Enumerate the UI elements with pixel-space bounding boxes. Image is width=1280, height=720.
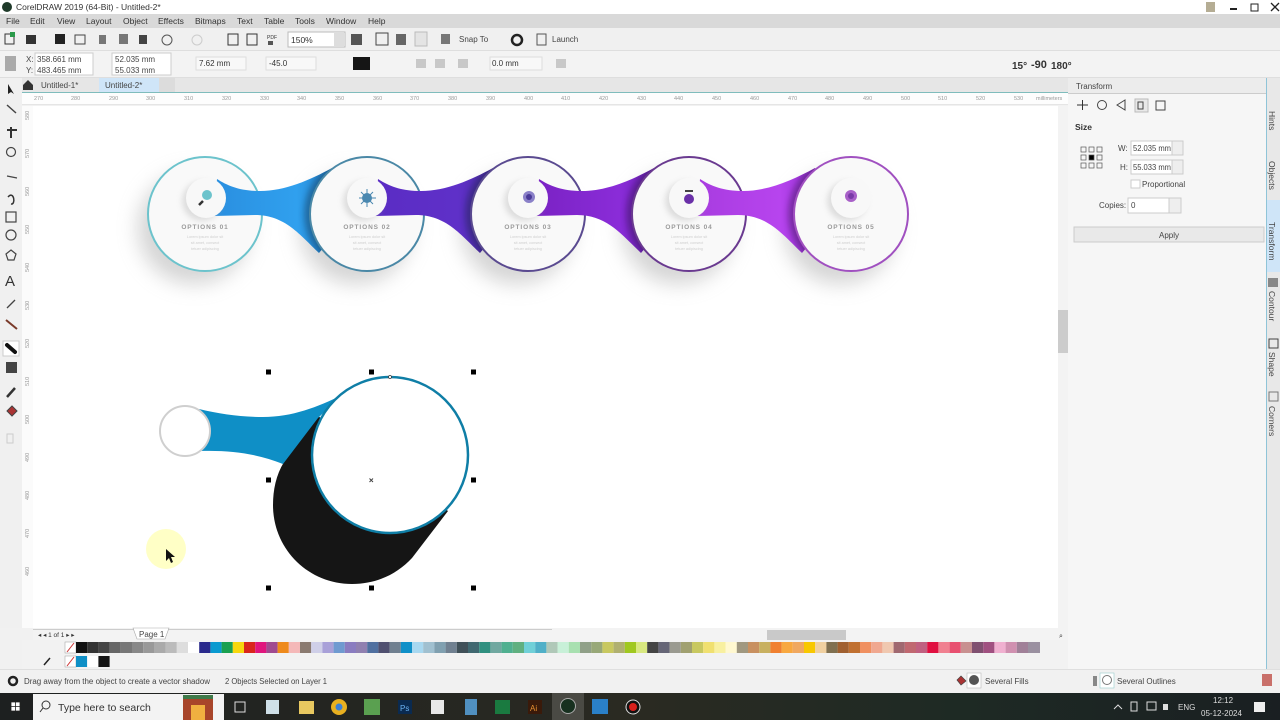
horizontal ruler [22, 92, 1068, 106]
menu bar: Window [326, 16, 357, 26]
menu bar: Text [237, 16, 253, 26]
system tray [1114, 696, 1265, 718]
ribbon 3 [536, 168, 654, 253]
vertical ruler: 520 [25, 339, 31, 348]
option 4: OPTIONS 04 [665, 224, 713, 231]
transform docker: Transform [1076, 82, 1112, 91]
colour palette [22, 640, 1068, 669]
standard toolbar: PDF [267, 35, 277, 41]
width field: W: [1118, 144, 1128, 153]
left toolbox: A [5, 273, 15, 290]
small circle with icon 3 [504, 178, 548, 221]
vertical ruler: 480 [25, 491, 31, 500]
status bar [0, 669, 1280, 693]
zoom level box: 150% [291, 35, 313, 45]
docker tool icons [1077, 99, 1165, 112]
active shadow tool [3, 341, 19, 356]
horizontal ruler: 380 [448, 96, 457, 102]
property bar: -45.0 [269, 59, 288, 68]
option 3 [471, 157, 585, 271]
system tray: ENG [1178, 703, 1195, 712]
option 2: Lorem ipsum dolor sit [349, 235, 386, 239]
fill colour swatch [353, 57, 370, 70]
system tray: 05-12-2024 [1201, 709, 1242, 718]
horizontal ruler: 300 [146, 96, 155, 102]
horizontal ruler: 510 [938, 96, 947, 102]
proportional checkbox: Proportional [1142, 180, 1185, 189]
option 5: tetuer adipiscing [837, 247, 865, 251]
right docker tabs: Objects [1267, 161, 1277, 190]
horizontal ruler: 280 [71, 96, 80, 102]
property bar [0, 50, 1280, 78]
vertical ruler: 500 [25, 415, 31, 424]
option 3: tetuer adipiscing [514, 247, 542, 251]
option 5 [794, 157, 908, 271]
right docker tabs [1266, 78, 1280, 669]
right docker tabs: Shape [1267, 352, 1277, 377]
right docker tabs: Transform [1267, 222, 1277, 260]
vertical ruler: 540 [25, 263, 31, 272]
taskbar app icons [235, 693, 640, 720]
standard toolbar: Snap To [459, 35, 489, 44]
large white circle [312, 377, 468, 533]
search box: Type here to search [58, 702, 151, 714]
taskbar app icons: Ai [530, 704, 537, 713]
object position fields: 358.661 mm [37, 55, 82, 64]
horizontal ruler: 520 [976, 96, 985, 102]
search box [33, 694, 224, 720]
object position fields: 483.465 mm [37, 66, 82, 75]
horizontal ruler: 470 [788, 96, 797, 102]
work-in-progress shape with selection [160, 370, 476, 590]
copies field: Copies: [1099, 201, 1126, 210]
horizontal ruler: 390 [486, 96, 495, 102]
option 3: Lorem ipsum dolor sit [510, 235, 547, 239]
ribbon 1 [214, 168, 332, 253]
standard toolbar: Launch [552, 35, 578, 44]
horizontal ruler: 480 [825, 96, 834, 102]
right docker tabs: Contour [1267, 291, 1277, 321]
vertical ruler: 460 [25, 567, 31, 576]
menu bar: File [6, 16, 20, 26]
vertical ruler: 580 [25, 111, 31, 120]
horizontal ruler: 370 [410, 96, 419, 102]
zoom level box [288, 32, 345, 47]
outline status [1093, 673, 1176, 688]
menu bar: View [57, 16, 76, 26]
document tabs: Untitled-2* [105, 81, 142, 90]
horizontal ruler: 310 [184, 96, 193, 102]
option 5: OPTIONS 05 [827, 224, 875, 231]
horizontal ruler: 420 [599, 96, 608, 102]
option 4 [632, 157, 746, 271]
horizontal ruler: 450 [712, 96, 721, 102]
menu bar: Help [368, 16, 386, 26]
horizontal ruler: 290 [109, 96, 118, 102]
fill status: Several Fills [985, 677, 1029, 686]
status bar: Drag away from the object to create a vector shadow [24, 677, 210, 686]
horizontal ruler: 350 [335, 96, 344, 102]
page navigator and horizontal scrollbar: ◂ ◂ 1 of 1 ▸ ▸ [38, 632, 75, 639]
height field [1120, 160, 1183, 174]
apply button: Apply [1159, 231, 1179, 240]
ribbon 2 [376, 168, 493, 253]
right docker tabs: Corners [1267, 406, 1277, 436]
vertical ruler: 510 [25, 377, 31, 386]
rotation shortcuts: -90 [1031, 59, 1047, 71]
page tab [133, 628, 169, 639]
status bar: 2 Objects Selected on Layer 1 [225, 677, 328, 686]
horizontal ruler: 360 [373, 96, 382, 102]
horizontal ruler: 270 [34, 96, 43, 102]
ribbon 4 [698, 168, 816, 253]
horizontal ruler: 340 [297, 96, 306, 102]
option 5: sit amet, consect [837, 241, 866, 245]
option 4: sit amet, consect [675, 241, 704, 245]
vertical scrollbar [1058, 106, 1068, 628]
option 1: OPTIONS 01 [181, 224, 229, 231]
drawing canvas [33, 106, 1058, 628]
option 3: OPTIONS 03 [504, 224, 552, 231]
property bar: Y: [26, 66, 33, 75]
standard toolbar [0, 28, 1280, 50]
blue ribbon [199, 395, 342, 464]
rotation shortcuts [1012, 59, 1072, 72]
vertical ruler [22, 106, 33, 628]
menu bar: Table [264, 16, 285, 26]
height field: H: [1120, 163, 1128, 172]
copies field: 0 [1131, 201, 1136, 210]
property bar: 7.62 mm [199, 59, 230, 68]
document tabs [22, 78, 1068, 92]
width field: 52.035 mm [1133, 144, 1171, 153]
apply button [1074, 227, 1264, 242]
rotation shortcuts: 180° [1051, 61, 1072, 72]
object size fields: 52.035 mm [115, 55, 155, 64]
property bar: 0.0 mm [492, 59, 519, 68]
property bar: X: [26, 55, 34, 64]
menu bar [0, 14, 1280, 28]
windows taskbar [0, 693, 1280, 720]
horizontal ruler: 430 [637, 96, 646, 102]
right docker tabs: Hints [1267, 111, 1277, 130]
width field [1118, 141, 1183, 155]
horizontal ruler: 440 [674, 96, 683, 102]
small circle with icon 1 [182, 178, 226, 221]
vertical ruler: 490 [25, 453, 31, 462]
option 1: sit amet, consect [191, 241, 220, 245]
horizontal ruler: 330 [260, 96, 269, 102]
horizontal ruler: 400 [524, 96, 533, 102]
option 5: Lorem ipsum dolor sit [833, 235, 870, 239]
rotation shortcuts: 15° [1012, 61, 1027, 72]
option 2: tetuer adipiscing [353, 247, 381, 251]
object size fields [112, 53, 171, 75]
small circle with icon 2 [343, 178, 387, 221]
anchor grid [1081, 147, 1102, 168]
selection handles [266, 370, 476, 590]
horizontal ruler: 490 [863, 96, 872, 102]
vertical ruler: 470 [25, 529, 31, 538]
menu bar: Object [123, 16, 148, 26]
object position fields [35, 53, 93, 75]
horizontal ruler: 460 [750, 96, 759, 102]
black shadow shape [273, 416, 448, 584]
page navigator and horizontal scrollbar [33, 628, 1068, 640]
option 1 [148, 157, 262, 271]
soft shadows [138, 172, 896, 284]
height field: 55.033 mm [1133, 163, 1171, 172]
title bar [0, 0, 1280, 14]
transform docker: Size [1075, 122, 1092, 132]
page tab: Page 1 [139, 630, 165, 639]
horizontal ruler: 530 [1014, 96, 1023, 102]
page navigator and horizontal scrollbar: ⌕ [1059, 633, 1063, 640]
left toolbox [0, 78, 22, 628]
horizontal ruler: 320 [222, 96, 231, 102]
horizontal ruler: 500 [901, 96, 910, 102]
menu bar: Tools [295, 16, 315, 26]
small white circle [160, 406, 210, 456]
object size fields: 55.033 mm [115, 66, 155, 75]
option 1: Lorem ipsum dolor sit [187, 235, 224, 239]
copies field [1099, 198, 1181, 213]
option 4: Lorem ipsum dolor sit [671, 235, 708, 239]
option 2 [310, 157, 424, 271]
menu bar: Edit [30, 16, 45, 26]
vertical ruler: 570 [25, 149, 31, 158]
menu bar: Bitmaps [195, 16, 226, 26]
system tray: 12:12 [1213, 696, 1234, 705]
horizontal ruler: millimeters [1036, 96, 1063, 102]
document palette [44, 656, 110, 667]
small circle with icon 4 [665, 178, 709, 221]
vertical ruler: 550 [25, 225, 31, 234]
vertical ruler: 560 [25, 187, 31, 196]
start button [11, 702, 20, 711]
horizontal ruler: 410 [561, 96, 570, 102]
transform docker [1068, 78, 1266, 669]
mouse cursor highlight [146, 529, 186, 569]
fill status [957, 673, 1029, 688]
option 2: sit amet, consect [353, 241, 382, 245]
taskbar app icons: Ps [400, 704, 409, 713]
option 2: OPTIONS 02 [343, 224, 391, 231]
title bar: CorelDRAW 2019 (64-Bit) - Untitled-2* [16, 2, 161, 12]
option 3: sit amet, consect [514, 241, 543, 245]
menu bar: Effects [158, 16, 184, 26]
infographic: five option circles with ribbons [138, 155, 908, 284]
menu bar: Layout [86, 16, 112, 26]
option 1: tetuer adipiscing [191, 247, 219, 251]
option 4: tetuer adipiscing [675, 247, 703, 251]
vertical ruler: 530 [25, 301, 31, 310]
document tabs: Untitled-1* [41, 81, 78, 90]
outline status: Several Outlines [1117, 677, 1176, 686]
